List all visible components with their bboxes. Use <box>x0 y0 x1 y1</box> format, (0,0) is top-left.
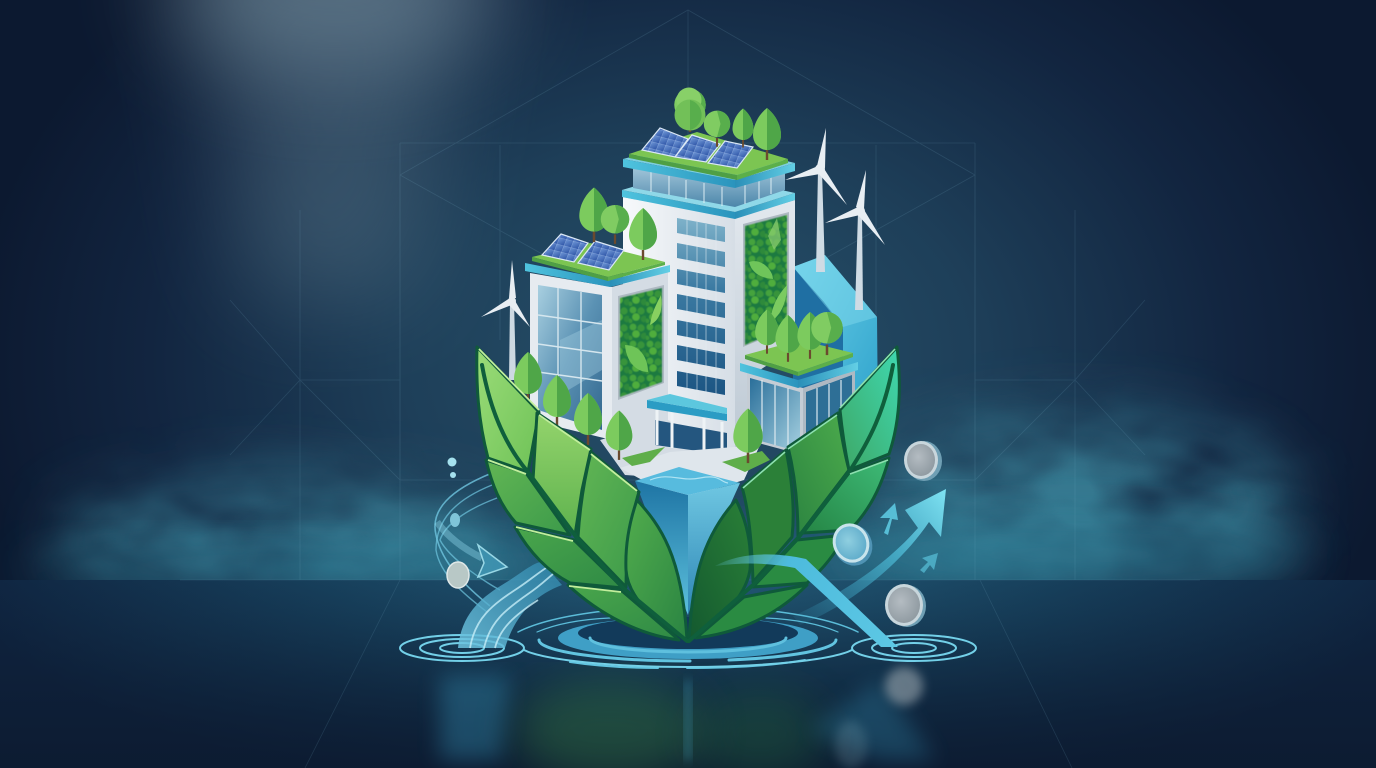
solar panels top <box>642 128 753 168</box>
leaf bowl <box>477 347 899 641</box>
turbine: middle <box>785 128 847 272</box>
coin middle <box>826 517 879 572</box>
coin upper <box>904 441 942 481</box>
low right block <box>740 310 858 455</box>
small arrow upper <box>880 503 898 535</box>
blue prism structure <box>793 255 878 420</box>
ground trees <box>514 352 763 463</box>
water ripples <box>400 611 976 668</box>
leaf veins <box>482 365 893 641</box>
low block glass <box>747 370 855 455</box>
water ribbon <box>715 554 898 647</box>
left flow lines and arrow <box>435 458 507 612</box>
leaf rim highlights <box>479 349 637 592</box>
living green wall tall <box>743 212 789 347</box>
right growth arrow <box>793 489 946 625</box>
left upper leaf panels <box>477 347 639 587</box>
building base <box>600 420 735 480</box>
turbine: left <box>481 260 530 380</box>
large glass window <box>538 285 602 430</box>
roof slab <box>623 132 795 188</box>
rooftop trees: left block <box>579 188 657 260</box>
left water stream <box>458 562 562 648</box>
turbine: right <box>825 170 885 310</box>
right ripple <box>852 635 976 661</box>
left roof <box>525 243 670 287</box>
small dots <box>448 458 456 478</box>
low block trees <box>755 310 843 362</box>
left ripple <box>400 635 524 661</box>
low block roof <box>740 340 858 388</box>
left block faces <box>530 272 668 440</box>
reflection on floor <box>440 667 935 768</box>
left lower leaf panels <box>515 527 679 640</box>
main ripple rings <box>518 611 858 668</box>
plaza <box>620 445 770 500</box>
wireframe backdrop <box>180 10 1200 768</box>
right leaf panels <box>696 347 899 638</box>
main tower <box>622 128 795 455</box>
entrance canopy <box>647 394 727 457</box>
coin lower <box>885 584 926 627</box>
tower faces <box>623 197 795 455</box>
left coin <box>447 562 469 588</box>
left block <box>525 234 670 440</box>
small arrow lower <box>920 553 938 573</box>
rooftop trees: tower <box>674 88 781 160</box>
tower windows <box>677 218 725 395</box>
upper glass floor <box>633 165 785 207</box>
living green wall small <box>618 285 664 400</box>
upper slab <box>622 170 795 219</box>
coins <box>826 441 942 627</box>
centre leaves <box>626 500 750 640</box>
water cube <box>635 467 740 615</box>
solar panels left <box>542 234 624 270</box>
